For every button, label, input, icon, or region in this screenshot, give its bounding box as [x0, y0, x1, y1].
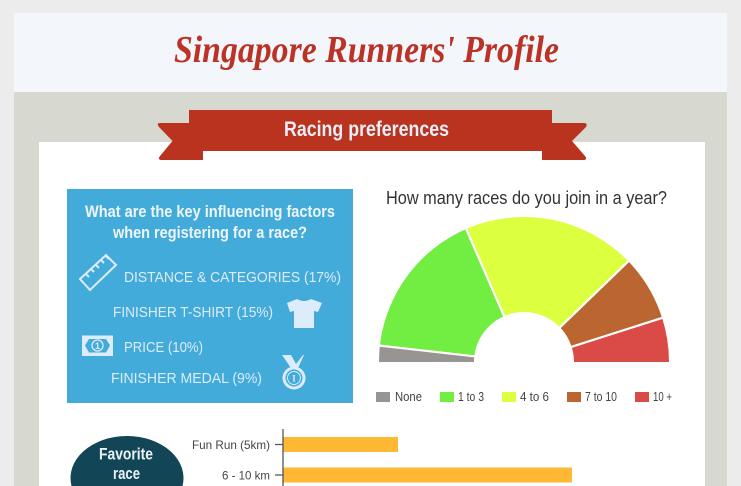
- header panel with title: Singapore Runners' Profile: [174, 29, 559, 71]
- icon: banknote: 1: [95, 341, 100, 351]
- bar chart: favorite race: [192, 429, 572, 486]
- chart legend: 7 to 10: [585, 390, 617, 404]
- panel heading: when registering for a race?: [112, 224, 307, 242]
- chart legend: 10 +: [653, 390, 672, 404]
- segment: 4 to 6: [466, 217, 628, 327]
- factor: price: PRICE (10%): [124, 339, 203, 356]
- segment: none: [379, 346, 474, 362]
- chart legend: 4 to 6: [520, 390, 549, 404]
- bar chart: favorite race: Fun Run (5km): [192, 438, 270, 452]
- factor: distance and categories: DISTANCE & CATEGORIES (17%): [124, 269, 341, 286]
- chart legend: 1 to 3: [458, 390, 484, 404]
- factor: finisher t-shirt: FINISHER T-SHIRT (15%): [113, 304, 273, 321]
- icon: ruler: [80, 255, 116, 290]
- semicircle chart: races per year: [379, 217, 669, 362]
- segment: 10 plus: [572, 318, 669, 362]
- chart legend: [376, 390, 672, 404]
- factor: finisher medal: FINISHER MEDAL (9%): [111, 370, 262, 387]
- chart legend: None: [395, 390, 422, 404]
- panel heading: What are the key influencing factors: [85, 203, 335, 221]
- chart heading: How many races do you join in a year?: [386, 188, 667, 208]
- icon: medal: [282, 355, 306, 390]
- segment: 1 to 3: [380, 229, 504, 356]
- bar chart: favorite race: 6 - 10 km: [222, 468, 270, 482]
- badge: favorite race: race: [113, 464, 140, 483]
- header panel with title: [14, 13, 727, 92]
- icon: medal: I: [292, 374, 296, 384]
- badge: favorite race: [70, 436, 184, 486]
- segment: 7 to 10: [560, 261, 662, 347]
- icon: banknote: [82, 336, 113, 356]
- ribbon banner: Racing preferences: Racing preferences: [284, 118, 449, 141]
- badge: favorite race: Favorite: [99, 444, 153, 464]
- icon: t-shirt: [287, 299, 322, 328]
- panel: key influencing factors: [67, 189, 353, 403]
- ribbon banner: Racing preferences: [158, 110, 587, 160]
- panel heading: [85, 203, 335, 242]
